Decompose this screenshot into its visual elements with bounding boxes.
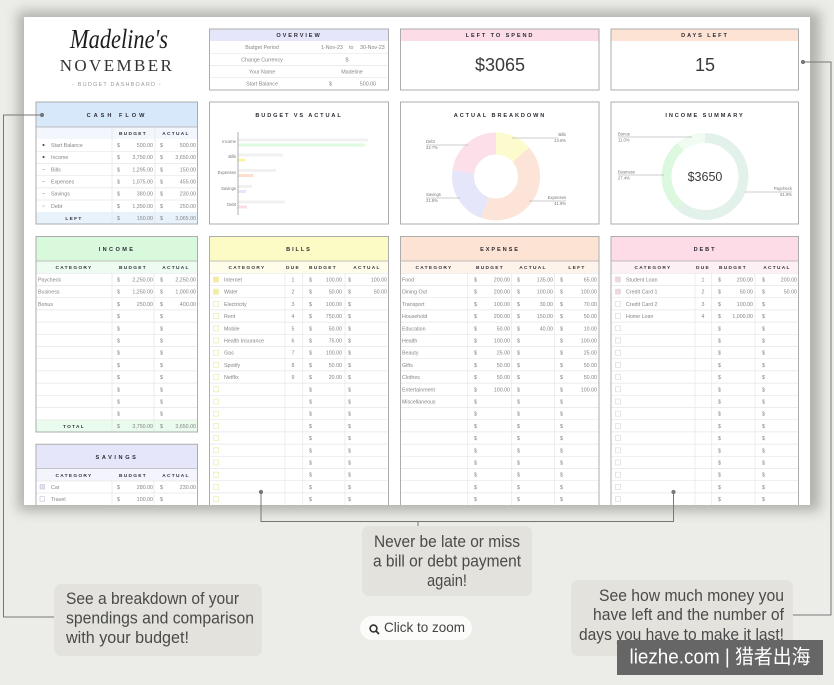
panel: bills table: $$ — [309, 497, 351, 503]
panel: cash flow: 150.00 — [137, 216, 153, 222]
panel: debt table: DUE — [696, 265, 710, 271]
panel: bills table: $$ — [309, 302, 351, 308]
panel: debt table: 50.00 — [784, 290, 797, 296]
panel: debt table: $$ — [718, 473, 765, 479]
panel: expense table: 50.00 — [497, 326, 510, 332]
panel: actual breakdown donut: Expenses — [548, 195, 566, 200]
panel: left to spend: $3065 — [475, 55, 525, 75]
panel: income table: ACTUAL — [162, 265, 190, 271]
panel: expense table: 150.00 — [537, 314, 553, 320]
panel: expense table: $$$ — [474, 448, 563, 454]
callout: money left: days you have to make it last! — [579, 626, 784, 644]
panel: expense table: 50.00 — [584, 363, 597, 369]
callout: bills: Never be late or miss — [374, 533, 520, 551]
panel: income table: $$ — [117, 338, 163, 344]
panel: cash flow: LEFT — [65, 216, 83, 222]
panel: expense table: $$$ — [474, 436, 563, 442]
title block: - BUDGET DASHBOARD - — [72, 82, 162, 88]
panel: cash flow: $$ — [117, 192, 163, 198]
panel: bills table: 6 — [292, 338, 295, 344]
panel: actual breakdown donut: 22.7% — [426, 145, 438, 150]
panel: bills table: 1 — [292, 278, 295, 284]
panel: budget vs actual chart: Savings — [221, 186, 236, 191]
panel: cash flow: 1,075.00 — [132, 180, 153, 186]
panel: expense table: $$$ — [474, 460, 563, 466]
panel: bills table: $$ — [309, 351, 351, 357]
panel: cash flow: CASH FLOW — [87, 113, 147, 119]
panel: expense table: 100.00 — [494, 387, 510, 393]
callout: money left — [571, 580, 793, 656]
panel: debt table: $$ — [718, 448, 765, 454]
panel: cash flow: 1,350.00 — [132, 204, 153, 210]
panel: debt table: Student Loan — [626, 278, 658, 284]
panel: debt table: 4 — [702, 314, 705, 320]
panel: expense table: 200.00 — [494, 278, 510, 284]
panel: budget vs actual chart: Income — [222, 139, 237, 144]
panel: cash flow: 3,065.00 — [175, 216, 196, 222]
panel: bills table: $$ — [309, 436, 351, 442]
panel: expense table: 50.00 — [584, 375, 597, 381]
panel: debt table: $$ — [718, 412, 765, 418]
panel: cash flow: 1,295.00 — [132, 167, 153, 173]
panel: cash flow: Start Balance — [51, 143, 83, 149]
panel: income table: 3,650.00 — [175, 424, 196, 430]
panel: expense table: Household — [402, 314, 427, 320]
panel: expense table: 100.00 — [581, 387, 597, 393]
panel: bills table: 50.00 — [374, 290, 387, 296]
panel: cash flow: $$ — [117, 204, 163, 210]
panel: savings table: SAVINGS — [96, 455, 138, 461]
panel: cash flow: Expenses — [51, 180, 75, 186]
arrow: bills and debt bracket — [259, 490, 675, 526]
panel: debt table: 200.00 — [781, 278, 797, 284]
panel: bills table: Mobile — [224, 326, 240, 332]
panel: savings table: BUDGET — [119, 473, 147, 479]
panel: income table: INCOME — [99, 247, 135, 253]
panel: expense table — [400, 236, 599, 505]
panel: cash flow: Savings — [51, 192, 70, 198]
panel: expense table: 135.00 — [537, 278, 553, 284]
panel: expense table: 30.00 — [540, 302, 553, 308]
panel: bills table: 50.00 — [329, 326, 342, 332]
panel: expense table: 100.00 — [581, 338, 597, 344]
panel: debt table: $$ — [718, 436, 765, 442]
panel: bills table: DUE — [286, 265, 300, 271]
panel: cash flow: BUDGET — [119, 131, 147, 137]
panel: bills table: Spotify — [224, 363, 241, 369]
panel: expense table: 100.00 — [494, 302, 510, 308]
panel: income table: $$ — [117, 375, 163, 381]
panel: debt table: $$ — [718, 290, 765, 296]
panel: income table: $$ — [117, 363, 163, 369]
callout: breakdown: See a breakdown of your — [66, 590, 239, 608]
panel: bills table: $$ — [309, 412, 351, 418]
panel: expense table: $$$ — [474, 314, 563, 320]
panel: debt table: Home Loan — [626, 314, 653, 320]
panel: savings table: 100.00 — [137, 497, 153, 503]
panel: income table: 1,000.00 — [175, 290, 196, 296]
panel: debt table: $$ — [718, 351, 765, 357]
panel: debt table: Credit Card 2 — [626, 302, 658, 308]
panel: overview: 500.00 — [360, 82, 376, 88]
panel: actual breakdown donut: 13.6% — [554, 138, 566, 143]
panel: bills table: $$ — [309, 424, 351, 430]
panel: savings table: 280.00 — [137, 485, 153, 491]
panel: bills table: Electricity — [224, 302, 247, 308]
panel: expense table: 65.00 — [584, 278, 597, 284]
panel: cash flow: 230.00 — [180, 192, 196, 198]
panel: left to spend — [400, 29, 599, 90]
panel: debt table: 200.00 — [737, 278, 753, 284]
panel: debt table: $$ — [718, 278, 765, 284]
panel: savings table: 230.00 — [180, 485, 196, 491]
panel: expense table: $$$ — [474, 473, 563, 479]
panel: bills table: 7 — [292, 351, 295, 357]
panel: income table: $$ — [117, 278, 163, 284]
panel: bills table: $$ — [309, 375, 351, 381]
panel: savings table: Travel — [51, 497, 66, 503]
panel: expense table: $$$ — [474, 400, 563, 406]
panel: debt table: CATEGORY — [634, 265, 672, 271]
panel: cash flow: 380.00 — [137, 192, 153, 198]
panel: bills table: 50.00 — [329, 363, 342, 369]
panel: cash flow: 500.00 — [180, 143, 196, 149]
panel: bills table: $$ — [309, 326, 351, 332]
panel: cash flow: 3,650.00 — [175, 155, 196, 161]
panel: expense table: $$$ — [474, 424, 563, 430]
panel: income table: $$ — [117, 424, 163, 430]
panel: cash flow: $$ — [117, 180, 163, 186]
title block: Madeline's — [69, 24, 168, 54]
panel: cash flow: $$ — [117, 155, 163, 161]
panel: bills table: 100.00 — [326, 302, 342, 308]
panel: debt table: $$ — [718, 387, 765, 393]
panel: cash flow: 250.00 — [180, 204, 196, 210]
panel: debt table: $$ — [718, 460, 765, 466]
panel: cash flow: 455.00 — [180, 180, 196, 186]
panel: bills table: 4 — [292, 314, 295, 320]
panel: income table: $$ — [117, 351, 163, 357]
title block — [60, 24, 174, 88]
panel: income table: 2,250.00 — [132, 278, 153, 284]
panel: debt table — [611, 236, 798, 505]
panel: cash flow: Income — [51, 155, 68, 161]
panel: income summary donut: Business — [618, 170, 635, 174]
panel: expense table: 50.00 — [497, 375, 510, 381]
panel: expense table: $$$ — [474, 278, 563, 284]
panel: savings table: $$ — [117, 497, 163, 503]
panel: debt table: ACTUAL — [763, 265, 791, 271]
panel: expense table: Education — [402, 326, 426, 332]
panel: bills table: Netflix — [224, 375, 239, 381]
callout: bills: a bill or debt payment — [373, 552, 521, 570]
panel: expense table: LEFT — [568, 265, 586, 271]
panel: bills table: 20.00 — [329, 375, 342, 381]
panel: bills table: $$ — [309, 448, 351, 454]
panel: cash flow: Bills — [51, 167, 61, 173]
panel: bills table: 100.00 — [326, 278, 342, 284]
panel: debt table: $$ — [718, 363, 765, 369]
callout: bills: again! — [427, 572, 467, 590]
panel: bills table: Internet — [224, 278, 242, 284]
panel: expense table: 200.00 — [494, 290, 510, 296]
panel: expense table: $$$ — [474, 375, 563, 381]
panel: savings table — [36, 444, 198, 505]
panel: budget vs actual chart: Debt — [227, 202, 237, 207]
panel: overview: Change Currency — [241, 57, 283, 63]
panel: debt table: 3 — [702, 302, 705, 308]
panel: expense table: 100.00 — [537, 290, 553, 296]
panel: income table: $$ — [117, 302, 163, 308]
panel: debt table: $$ — [718, 314, 765, 320]
panel: expense table: Transport — [402, 302, 425, 308]
panel: bills table: CATEGORY — [228, 265, 266, 271]
panel: expense table: $$$ — [474, 363, 563, 369]
panel: bills table: $$ — [309, 460, 351, 466]
panel: expense table: Entertainment — [402, 387, 436, 393]
panel: expense table: 50.00 — [584, 314, 597, 320]
panel: bills table: 9 — [292, 375, 295, 381]
panel: income table: $$ — [117, 412, 163, 418]
panel: cash flow: Debt — [51, 204, 63, 210]
panel: bills table: $$ — [309, 387, 351, 393]
panel: expense table: 100.00 — [581, 290, 597, 296]
panel: debt table: $$ — [718, 302, 765, 308]
panel: expense table: EXPENSE — [480, 247, 520, 253]
callout: breakdown: spendings and comparison — [66, 610, 254, 628]
panel: income summary donut: $3650 — [688, 170, 722, 184]
panel: expense table: 50.00 — [497, 363, 510, 369]
panel: debt table: $$ — [718, 485, 765, 491]
panel: expense table: 25.00 — [584, 351, 597, 357]
panel: expense table: 10.00 — [584, 326, 597, 332]
panel: savings table: ACTUAL — [162, 473, 190, 479]
panel: bills table: $$ — [309, 485, 351, 491]
panel: income table: 250.00 — [137, 302, 153, 308]
panel: income table: 1,250.00 — [132, 290, 153, 296]
panel: expense table: $$$ — [474, 326, 563, 332]
panel: debt table: $$ — [718, 400, 765, 406]
panel: cash flow: $$ — [117, 167, 163, 173]
panel: debt table: DEBT — [694, 247, 716, 253]
panel: expense table: $$$ — [474, 387, 563, 393]
panel: actual breakdown donut: 21.8% — [426, 198, 438, 203]
panel: expense table: 25.00 — [497, 351, 510, 357]
panel: bills table: Health Insurance — [224, 338, 264, 344]
panel: income summary donut: Bonus — [618, 132, 630, 136]
panel: bills table: 3 — [292, 302, 295, 308]
panel: overview: OVERVIEW — [276, 33, 322, 39]
panel: expense table: 100.00 — [494, 338, 510, 344]
panel: expense table: Miscellaneous — [402, 400, 436, 406]
watermark — [617, 640, 823, 675]
panel: budget vs actual chart: Bills — [228, 154, 236, 159]
panel: expense table: 70.00 — [584, 302, 597, 308]
panel: bills table: 50.00 — [329, 290, 342, 296]
panel: overview: $ — [329, 82, 332, 88]
panel: income table: TOTAL — [63, 424, 85, 430]
panel: income table: BUDGET — [119, 265, 147, 271]
panel: cash flow: 3,750.00 — [132, 155, 153, 161]
panel: savings table: CATEGORY — [55, 473, 93, 479]
panel: debt table: $$ — [718, 338, 765, 344]
panel: debt table: $$ — [718, 375, 765, 381]
panel: expense table: Gifts — [402, 363, 413, 369]
panel: bills table: $$ — [309, 400, 351, 406]
panel: bills table: 100.00 — [371, 278, 387, 284]
panel: debt table: BUDGET — [719, 265, 747, 271]
panel: income table — [36, 236, 198, 432]
panel: expense table: $$$ — [474, 412, 563, 418]
panel: income table: 2,250.00 — [175, 278, 196, 284]
panel: expense table: $$$ — [474, 351, 563, 357]
panel: cash flow: $$ — [117, 216, 163, 222]
panel: overview: Budget Period — [245, 45, 279, 51]
panel: bills table: Rent — [224, 314, 236, 320]
panel: bills table: 8 — [292, 363, 295, 369]
panel: bills table — [210, 236, 388, 505]
panel: expense table: Dining Out — [402, 290, 428, 296]
panel: debt table: $$ — [718, 424, 765, 430]
panel: income table: CATEGORY — [55, 265, 93, 271]
panel: bills table: $$ — [309, 290, 351, 296]
panel: debt table: 100.00 — [737, 302, 753, 308]
panel: income table: Business — [38, 290, 60, 296]
watermark: liezhe.com | 猎者出海 — [630, 646, 810, 668]
panel: budget vs actual chart — [210, 102, 388, 224]
dashboard sheet — [24, 17, 810, 505]
panel: days left — [611, 29, 798, 90]
callout: breakdown: with your budget! — [65, 629, 189, 647]
panel: expense table: Beauty — [402, 351, 419, 357]
panel: bills table: 100.00 — [326, 351, 342, 357]
panel: actual breakdown donut: Debt — [426, 139, 436, 144]
panel: budget vs actual chart: Expenses — [218, 170, 236, 175]
panel: income summary donut: 61.6% — [780, 192, 792, 197]
panel: overview: 1-Nov-23 — [321, 45, 343, 51]
panel: income table: $$ — [117, 326, 163, 332]
panel: debt table: 2 — [702, 290, 705, 296]
panel: overview: 30-Nov-23 — [360, 45, 385, 51]
panel: bills table: $$ — [309, 363, 351, 369]
arrow: days left connector — [793, 60, 831, 615]
panel: bills table: Water — [224, 290, 238, 296]
panel: actual breakdown donut: Savings — [426, 192, 441, 197]
panel: debt table: $$ — [718, 326, 765, 332]
arrow: cash flow connector — [4, 113, 54, 617]
panel: income table: 3,750.00 — [132, 424, 153, 430]
panel: bills table: 75.00 — [329, 338, 342, 344]
panel: income table: $$ — [117, 387, 163, 393]
panel: bills table: BUDGET — [309, 265, 337, 271]
panel: bills table: Gas — [224, 351, 234, 357]
panel: savings table: $$ — [117, 485, 163, 491]
panel: cash flow: 150.00 — [180, 167, 196, 173]
panel: income summary donut: 11.0% — [618, 138, 630, 142]
title block: NOVEMBER — [60, 56, 174, 75]
panel: overview: to — [349, 45, 353, 51]
panel: bills table: $$ — [309, 314, 351, 320]
panel: expense table: BUDGET — [476, 265, 504, 271]
panel: expense table: $$$ — [474, 497, 563, 503]
panel: days left: 15 — [695, 55, 715, 75]
panel: days left: DAYS LEFT — [681, 33, 729, 39]
panel: bills table: $$ — [309, 338, 351, 344]
panel: expense table: $$$ — [474, 290, 563, 296]
panel: debt table: 50.00 — [740, 290, 753, 296]
panel: income summary donut: 27.4% — [618, 176, 630, 180]
panel: cash flow: 500.00 — [137, 143, 153, 149]
panel: expense table: 40.00 — [540, 326, 553, 332]
callout: breakdown — [54, 584, 262, 656]
panel: income table: Paycheck — [38, 278, 61, 284]
panel: overview: Your Name — [249, 70, 275, 76]
panel: bills table: $$ — [309, 278, 351, 284]
panel: budget vs actual chart: BUDGET VS ACTUAL — [255, 113, 343, 119]
panel: actual breakdown donut — [400, 102, 599, 224]
panel: expense table: 200.00 — [494, 314, 510, 320]
panel: actual breakdown donut: Bills — [558, 132, 566, 137]
callout: bills — [362, 526, 532, 596]
panel: actual breakdown donut: 41.9% — [554, 201, 566, 206]
callout: money left: See how much money you — [599, 587, 784, 605]
panel: income summary donut: Paycheck — [774, 186, 793, 191]
panel: bills table: ACTUAL — [353, 265, 381, 271]
panel: bills table: BILLS — [286, 247, 312, 253]
panel: savings table: Car — [51, 485, 60, 491]
panel: expense table: Food — [402, 278, 414, 284]
panel: actual breakdown donut: ACTUAL BREAKDOWN — [454, 113, 546, 119]
panel: cash flow — [36, 102, 198, 224]
panel: income table: $$ — [117, 290, 163, 296]
panel: left to spend: LEFT TO SPEND — [466, 33, 534, 39]
panel: overview — [210, 29, 388, 90]
panel: cash flow: ACTUAL — [162, 131, 190, 137]
panel: expense table: $$$ — [474, 302, 563, 308]
panel: expense table: ACTUAL — [519, 265, 547, 271]
panel: expense table: $$$ — [474, 338, 563, 344]
callout: money left: have left and the number of — [593, 606, 784, 624]
panel: overview: Madeline — [341, 70, 363, 76]
panel: bills table: 2 — [292, 290, 295, 296]
panel: income table: $$ — [117, 400, 163, 406]
panel: income table: $$ — [117, 314, 163, 320]
panel: debt table: Credit Card 1 — [626, 290, 658, 296]
panel: expense table: Clothes — [402, 375, 420, 381]
panel: income summary donut: INCOME SUMMARY — [665, 113, 745, 119]
panel: debt table: 1 — [702, 278, 705, 284]
panel: bills table: 5 — [292, 326, 295, 332]
panel: debt table: $$ — [718, 497, 765, 503]
panel: debt table: 1,000.00 — [732, 314, 753, 320]
panel: expense table: $$$ — [474, 485, 563, 491]
panel: income summary donut — [611, 102, 798, 224]
panel: bills table: 750.00 — [326, 314, 342, 320]
click to zoom button: Click to zoom — [384, 619, 465, 635]
panel: bills table: $$ — [309, 473, 351, 479]
panel: expense table: CATEGORY — [415, 265, 453, 271]
click to zoom button — [360, 616, 472, 640]
panel: expense table: Health — [402, 338, 417, 344]
panel: cash flow: $$ — [117, 143, 163, 149]
panel: income table: Bonus — [38, 302, 53, 308]
panel: overview: $ — [346, 57, 349, 63]
panel: income table: 400.00 — [180, 302, 196, 308]
panel: overview: Start Balance — [246, 82, 278, 88]
